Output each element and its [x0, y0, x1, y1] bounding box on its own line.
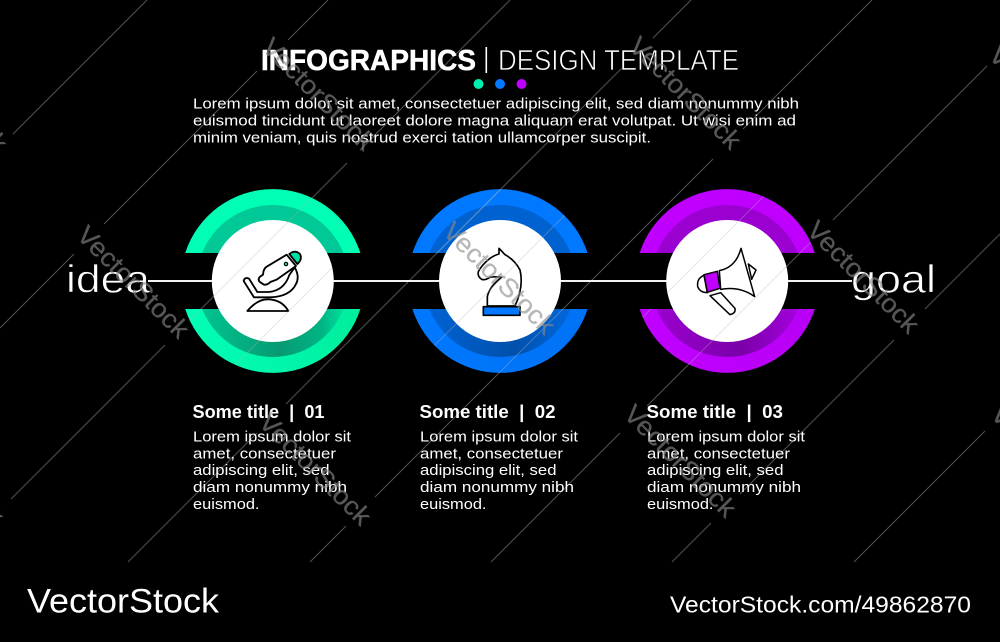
watermarks: [0, 31, 1000, 532]
watermarks: VectorStock: [253, 407, 378, 532]
step 2 text: Lorem ipsum dolor sit: [420, 428, 579, 445]
step 2 text: [420, 402, 579, 513]
step 1 text: diam nonummy nibh: [193, 479, 347, 496]
label: idea: idea: [66, 258, 150, 302]
step 1 text: Lorem ipsum dolor sit: [193, 428, 352, 445]
panel: step 2 ring: [412, 189, 588, 373]
icon: chess knight: [478, 248, 521, 315]
icon: microscope: [244, 252, 301, 311]
step 2 text: amet, consectetuer: [420, 445, 563, 462]
step 1 text: [192, 402, 352, 513]
watermarks: VectorStock: [256, 32, 381, 157]
panel: step 1 ring: [185, 189, 360, 373]
step 3 text: Some title | 03: [646, 402, 783, 422]
step 2 text: euismod.: [420, 496, 486, 513]
title: [261, 45, 739, 77]
intro paragraph: euismod tincidunt ut laoreet dolore magna aliquam erat volutpat. Ut wisi enim ad: [193, 112, 796, 130]
step 3 text: euismod.: [647, 496, 714, 513]
step 1 text: euismod.: [193, 496, 260, 513]
step 1 text: amet, consectetuer: [193, 445, 336, 462]
watermarks: VectorStock: [801, 215, 926, 340]
step 3 text: adipiscing elit, sed: [647, 462, 784, 479]
step 3 text: amet, consectetuer: [647, 445, 790, 462]
watermarks: VectorStock: [71, 220, 196, 345]
watermarks: VectorStock: [618, 399, 743, 524]
intro paragraph: Lorem ipsum dolor sit amet, consectetuer adipiscing elit, sed diam nonummy nibh: [193, 96, 799, 113]
title: DESIGN TEMPLATE: [498, 45, 739, 77]
intro paragraph: minim veniam, quis nostrud exerci tation ullamcorper suscipit.: [193, 129, 651, 146]
label: goal: goal: [851, 258, 936, 302]
step 3 text: [646, 402, 806, 513]
colour dots: [474, 79, 526, 89]
step 2 text: adipiscing elit, sed: [420, 462, 556, 479]
step 2 text: diam nonummy nibh: [420, 479, 574, 496]
intro paragraph: [193, 96, 799, 146]
step 1 text: adipiscing elit, sed: [193, 462, 330, 479]
step 2 text: Some title | 02: [420, 402, 556, 422]
connector line: [148, 280, 852, 282]
watermarks: VectorStock: [623, 31, 748, 156]
step 3 text: diam nonummy nibh: [647, 479, 801, 496]
panel: step 3 ring: [640, 189, 815, 373]
step 1 text: Some title | 01: [192, 402, 324, 422]
title: INFOGRAPHICS: [261, 45, 476, 77]
footer logo: VectorStock: [27, 583, 220, 621]
watermarks: VectorStock: [437, 216, 562, 341]
step 3 text: Lorem ipsum dolor sit: [647, 428, 806, 445]
icon: megaphone: [698, 248, 756, 315]
footer image id: VectorStock.com/49862870: [670, 592, 971, 618]
